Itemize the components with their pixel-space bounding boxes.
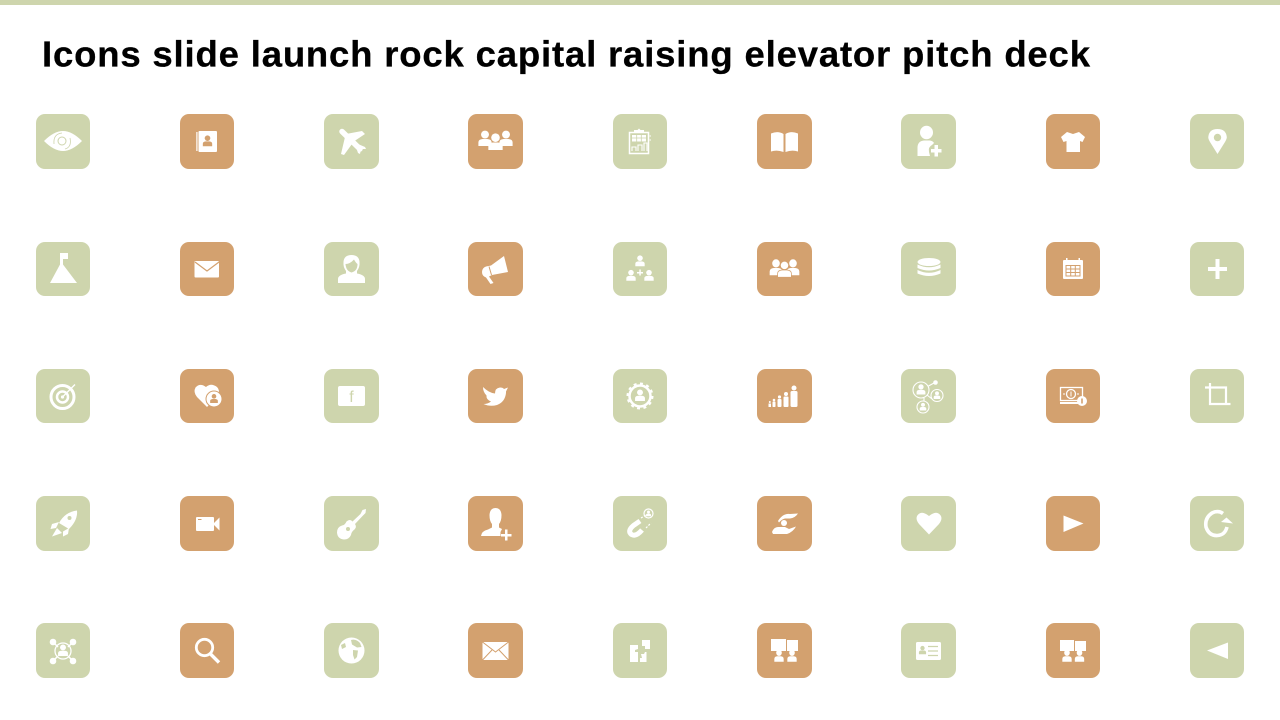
icon: facebook (324, 369, 379, 423)
icon: id card (901, 623, 956, 678)
icon: mail (180, 242, 234, 296)
icon: database (901, 242, 956, 296)
icon: eye (36, 114, 90, 169)
icon: user network (901, 369, 956, 423)
icon: t-shirt (1046, 114, 1100, 169)
icon: clipboard report (613, 114, 667, 169)
icon: map pin (1190, 114, 1244, 169)
icon: back triangle (1190, 623, 1244, 678)
icon: calendar (1046, 242, 1100, 296)
icon: presenters with boards (1046, 623, 1100, 678)
icon: refresh arrow (1190, 496, 1244, 551)
icon: guitar (324, 496, 379, 551)
icon: puzzle (613, 623, 667, 678)
icon: summit flag (36, 242, 90, 296)
icon: add user silhouette (468, 496, 523, 551)
icon: woman avatar (324, 242, 379, 296)
icon grid (36, 114, 1244, 678)
icon: magnet attracting user (613, 496, 667, 551)
icon: heart with person (180, 369, 234, 423)
icon: growing family (757, 369, 812, 423)
icon: video camera (180, 496, 234, 551)
icon: add user (901, 114, 956, 169)
icon: three people (468, 114, 523, 169)
title: Icons slide launch rock capital raising elevator pitch deck (42, 34, 1091, 74)
icon: gear with user (613, 369, 667, 423)
icon: presenters with boards (757, 623, 812, 678)
top accent bar (0, 0, 1280, 5)
icon: rocket (36, 496, 90, 551)
icon: twitter bird (468, 369, 523, 423)
icon: megaphone (468, 242, 523, 296)
icon: magnifier (180, 623, 234, 678)
icon: envelope (468, 623, 523, 678)
icon: hands with person (757, 496, 812, 551)
icon: banknote and coin (1046, 369, 1100, 423)
icon: organisation chart (613, 242, 667, 296)
icon: heart (901, 496, 956, 551)
icon: contact book (180, 114, 234, 169)
icon: user hub (36, 623, 90, 678)
icon: crop (1190, 369, 1244, 423)
icon: plus (1190, 242, 1244, 296)
icon: open book (757, 114, 812, 169)
icon: globe (324, 623, 379, 678)
icon: target (36, 369, 90, 423)
icon: play triangle (1046, 496, 1100, 551)
icon: airplane (324, 114, 379, 169)
icon: team group (757, 242, 812, 296)
icon: facebook: f (349, 389, 354, 406)
